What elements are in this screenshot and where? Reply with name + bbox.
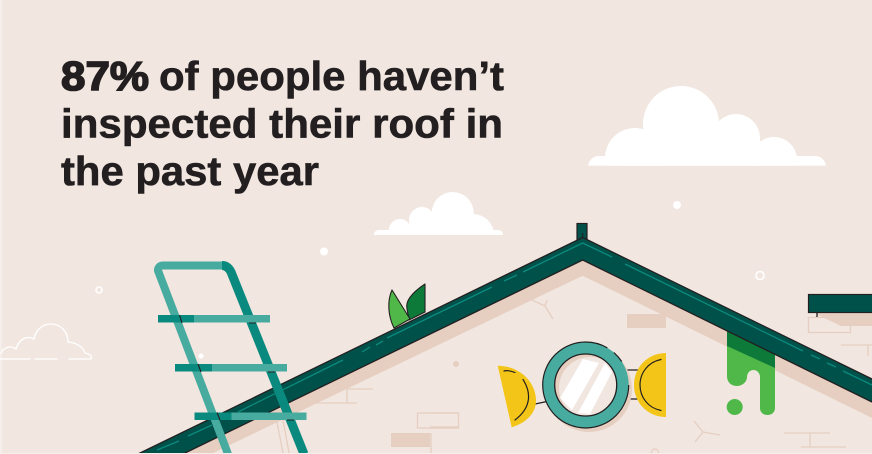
small white cloud [374,192,503,235]
roof beam [138,238,872,454]
ladder left leg and top [158,266,228,454]
window ring [543,342,629,428]
roof ridge cap [577,224,587,240]
wall: bricks and cracks [277,300,872,454]
round window [535,342,638,432]
window glass [555,354,617,416]
yellow left shutter [498,366,536,427]
title: the past year [61,148,319,194]
title: of people haven’t [159,53,504,99]
outline cloud [0,324,91,359]
green slime drip [727,325,775,415]
roof dashes [157,243,872,450]
right dark beam [808,294,872,326]
yellow right shutter [634,353,666,417]
ladder [158,266,306,454]
title: 87% [61,53,149,99]
window shadow [546,346,632,432]
decorative dots and rings [96,201,764,367]
ladder rungs [158,315,306,420]
green leaves [389,284,425,328]
window connectors [535,370,638,404]
large white cloud [588,86,826,166]
title: inspected their roof in [61,100,503,146]
title [61,53,504,194]
roof [138,224,872,454]
ladder right leg [222,266,304,454]
roof shadow [183,260,872,454]
